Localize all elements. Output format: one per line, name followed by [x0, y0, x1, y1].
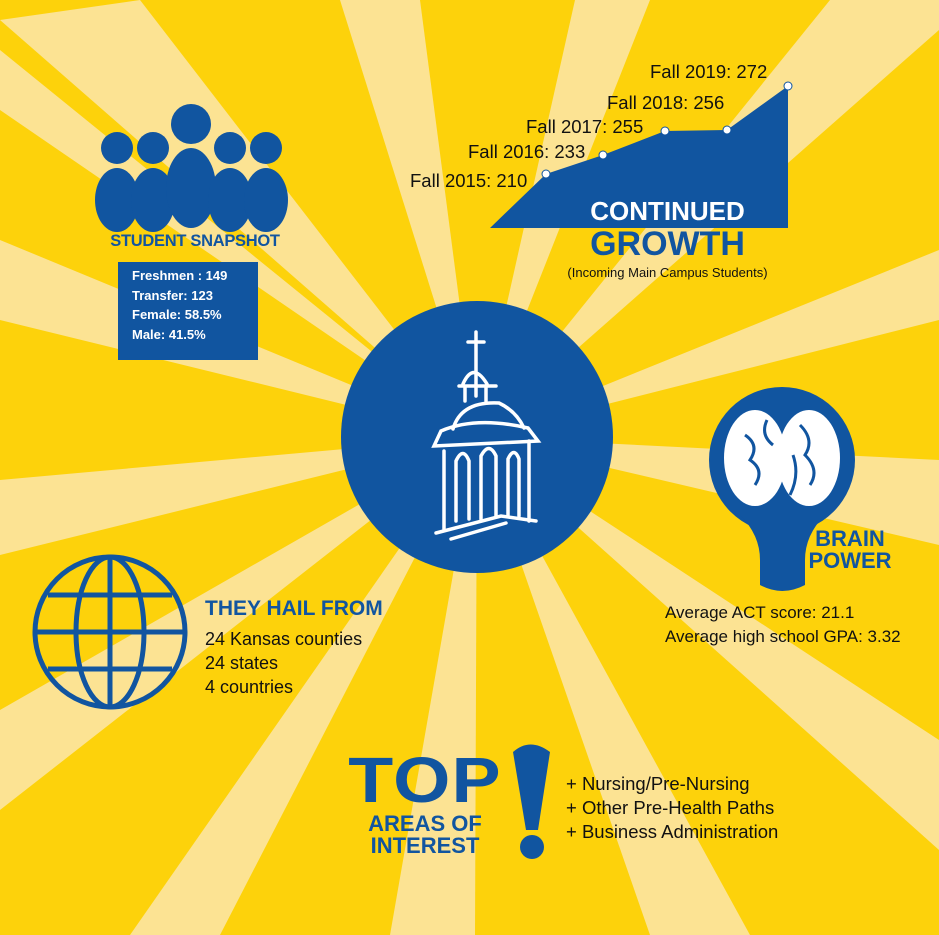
- heading: continued growth: CONTINUED: [590, 196, 745, 226]
- text: interest list: + Other Pre-Health Paths: [566, 797, 774, 818]
- heading: top areas of interest: INTEREST: [371, 833, 479, 858]
- chart: continued growth: Fall 2018: 256: [607, 92, 724, 113]
- heading: top areas of interest: [348, 744, 502, 858]
- heading: top areas of interest: TOP: [348, 744, 502, 816]
- panel: snapshot stats: Transfer: 123: [132, 288, 213, 302]
- icon: globe: [32, 554, 188, 710]
- icon: exclamation: [513, 744, 550, 859]
- heading: brain power: BRAIN: [815, 526, 885, 551]
- heading: continued growth: [567, 196, 768, 280]
- text: origins: 24 states: [205, 653, 278, 673]
- chart: continued growth: Fall 2016: 233: [468, 141, 585, 162]
- text: origins: 24 Kansas counties: [205, 629, 362, 649]
- chart: continued growth: [410, 61, 792, 228]
- panel: snapshot stats: Male: 41.5%: [132, 326, 206, 342]
- text: scores: Average ACT score: 21.1: [665, 603, 854, 622]
- heading: they hail from: THEY HAIL FROM: [205, 597, 383, 620]
- text: origins: 4 countries: [205, 677, 293, 697]
- heading: top areas of interest: AREAS OF: [368, 811, 482, 836]
- chart: continued growth: Fall 2019: 272: [650, 61, 767, 82]
- panel: snapshot stats: Female: 58.5%: [132, 307, 222, 322]
- icon: people: [95, 104, 288, 232]
- heading: continued growth: GROWTH: [590, 225, 745, 263]
- heading: student snapshot: STUDENT SNAPSHOT: [110, 232, 280, 250]
- chart: continued growth: Fall 2015: 210: [410, 170, 527, 191]
- icon: center circle with cupola: [341, 301, 613, 573]
- text: origins: [205, 629, 362, 697]
- chart: continued growth: Fall 2017: 255: [526, 116, 643, 137]
- text: scores: Average high school GPA: 3.32: [665, 627, 901, 646]
- heading: brain power: POWER: [808, 548, 892, 573]
- text: scores: [665, 603, 901, 646]
- text: interest list: [566, 773, 778, 842]
- heading: continued growth: (Incoming Main Campus Students): [567, 265, 768, 280]
- panel: snapshot stats: Freshmen : 149: [132, 268, 227, 283]
- panel: snapshot stats: [118, 262, 258, 360]
- text: interest list: + Nursing/Pre-Nursing: [566, 773, 750, 794]
- text: interest list: + Business Administration: [566, 821, 778, 842]
- heading: brain power: [808, 526, 892, 573]
- icon: brain lightbulb: [709, 387, 855, 591]
